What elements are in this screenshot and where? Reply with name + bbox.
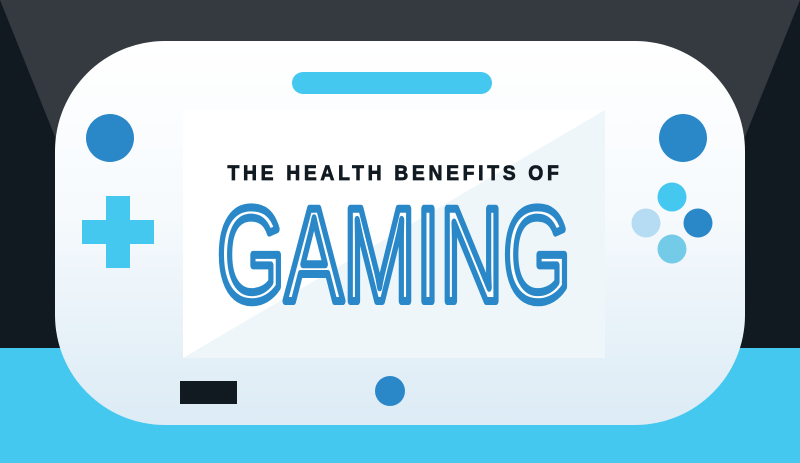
action buttons <box>632 182 712 264</box>
right joystick <box>659 114 707 162</box>
left joystick <box>86 114 134 162</box>
d-pad <box>82 196 154 268</box>
screen <box>183 110 605 358</box>
top pill slot <box>292 72 492 94</box>
black button <box>180 381 237 404</box>
subtitle: THE HEALTH BENEFITS OF <box>228 162 562 185</box>
controller body <box>55 41 745 425</box>
home button <box>375 376 405 406</box>
title: GAMING: GAMING <box>217 181 571 330</box>
